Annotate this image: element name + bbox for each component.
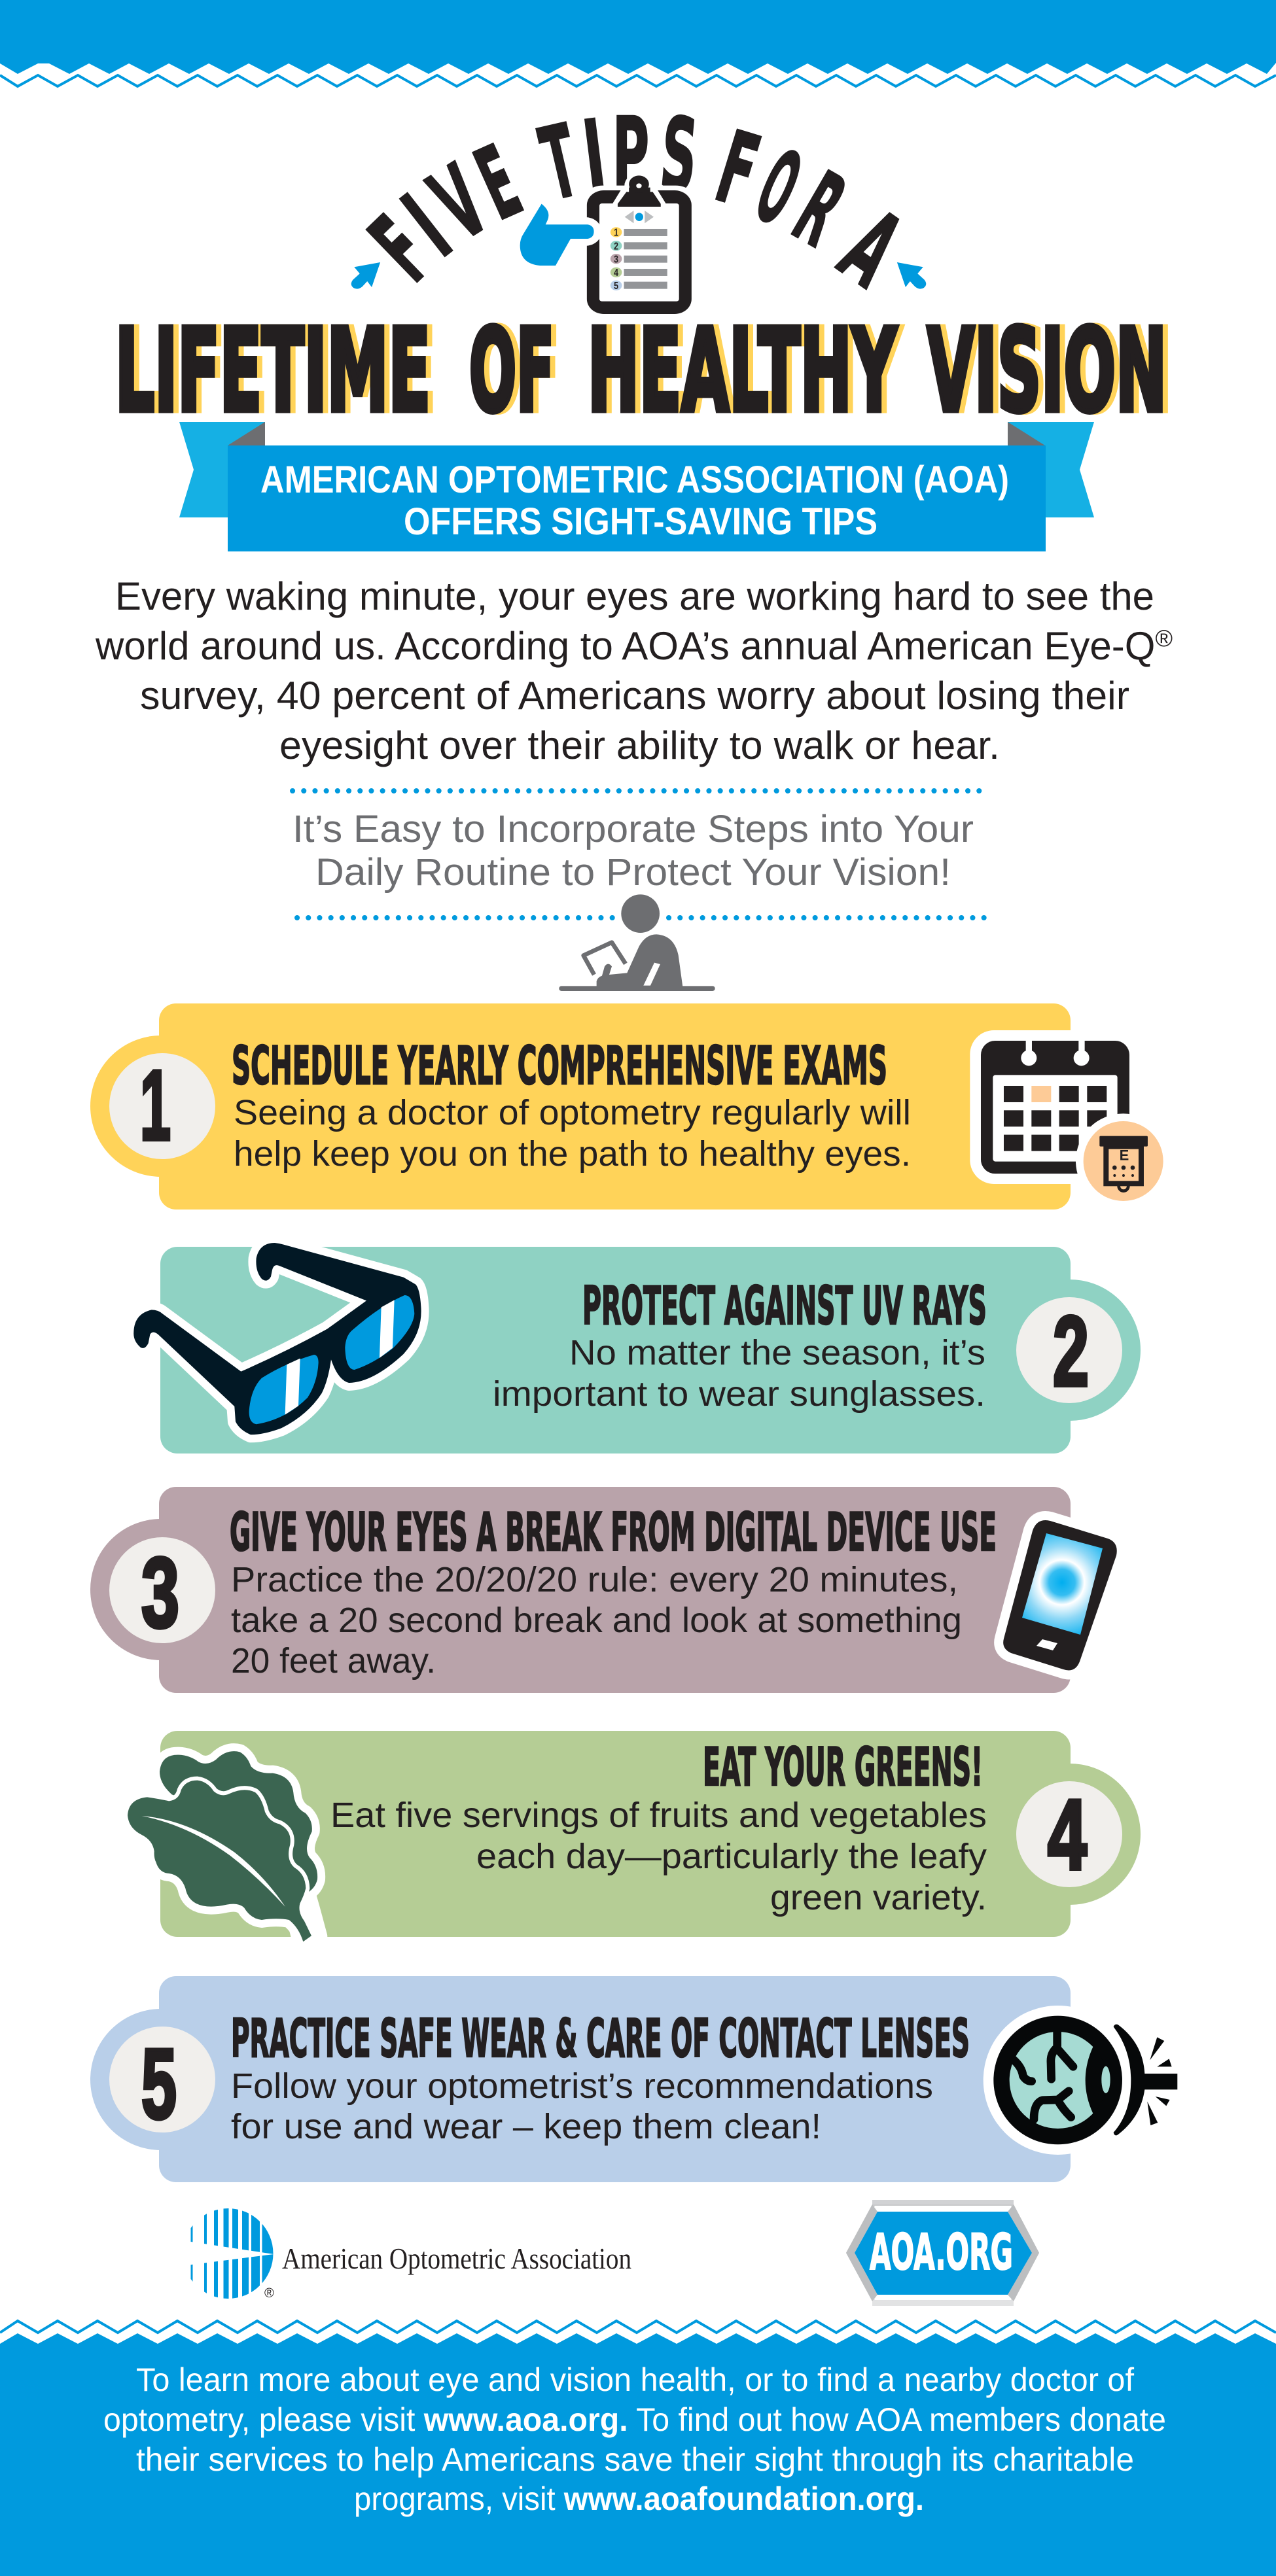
icon: clipboard with pointing hand: 5	[614, 281, 618, 292]
icon: leafy green	[128, 1751, 319, 1941]
heading: lifetime of healthy vision: HEALTHY	[588, 305, 897, 438]
icon: clipboard with pointing hand	[520, 173, 697, 319]
footer text	[103, 2361, 1166, 2517]
icon: clipboard with pointing hand: 2	[614, 241, 618, 252]
footer band	[0, 2321, 1276, 2576]
badge: aoa.org: AOA.ORG	[870, 2223, 1013, 2281]
icon: sunglasses	[133, 1243, 421, 1435]
ribbon banner: AMERICAN OPTOMETRIC ASSOCIATION (AOA)	[260, 459, 1009, 501]
panel: tip 1 exams	[90, 1003, 1171, 1210]
tip 2 text: No matter the season, it’s	[569, 1333, 985, 1372]
number 5 badge: 5	[141, 2028, 177, 2140]
number 3 badge: 3	[141, 1537, 179, 1648]
icon: person writing at desk	[559, 894, 715, 991]
tip 1 text: Seeing a doctor of optometry regularly will	[234, 1093, 911, 1132]
number 2 badge: 2	[1053, 1296, 1089, 1407]
heading: five tips for a (arched): O	[741, 129, 816, 248]
heading: lifetime of healthy vision: LIFETIME	[115, 305, 431, 438]
dotted divider upper	[292, 788, 983, 793]
number 3 badge	[109, 1537, 215, 1648]
heading: five tips for a (arched): A	[821, 188, 921, 309]
footer text: optometry, please visit www.aoa.org. To find out how AOA members donate	[103, 2401, 1166, 2438]
logo mark	[191, 2208, 274, 2299]
intro paragraph: world around us. According to AOA’s annual American Eye-Q	[96, 624, 1155, 668]
tip 4 text: Eat five servings of fruits and vegetables	[330, 1796, 987, 1835]
footer text: To learn more about eye and vision health, or to find a nearby doctor of	[136, 2361, 1134, 2398]
logo wordmark: American Optometric Association	[282, 2242, 631, 2275]
icon: clipboard with pointing hand: 1	[614, 228, 618, 238]
heading: five tips for a (arched): R	[776, 151, 863, 269]
tip 2 text	[493, 1333, 985, 1414]
intro paragraph: eyesight over their ability to walk or hear.	[279, 723, 1000, 767]
heading shadow: lifetime of healthy vision	[120, 305, 1172, 438]
tip 3 text: 20 feet away.	[231, 1641, 436, 1680]
heading: five tips for a (arched): I	[384, 175, 470, 278]
icon: left blue arrow	[351, 262, 380, 289]
heading: five tips for a (arched): V	[413, 144, 506, 262]
number 4 badge: 4	[1048, 1779, 1087, 1890]
subheading: Daily Routine to Protect Your Vision!	[315, 851, 951, 894]
intro paragraph: ®	[1155, 625, 1173, 652]
intro paragraph	[95, 574, 1173, 767]
tip 1 text	[234, 1093, 911, 1174]
panel: tip 3 digital break	[90, 1487, 1117, 1693]
tip 3 text: take a 20 second break and look at something	[231, 1601, 962, 1640]
footer text: their services to help Americans save their sight through its charitable	[136, 2441, 1134, 2478]
badge: aoa.org	[846, 2200, 1039, 2306]
footer text: programs, visit www.aoafoundation.org.	[354, 2480, 924, 2517]
ribbon banner: OFFERS SIGHT-SAVING TIPS	[404, 500, 877, 543]
subheading	[292, 808, 974, 894]
tip 3 text: Practice the 20/20/20 rule: every 20 minutes,	[231, 1560, 958, 1599]
number 2 badge	[1016, 1296, 1122, 1407]
number 1 badge	[109, 1050, 215, 1161]
icon: right blue arrow	[897, 262, 926, 289]
heading: lifetime of healthy vision: OF	[469, 305, 554, 438]
icon: calendar with eye chart: E	[1120, 1147, 1129, 1163]
ribbon banner	[179, 422, 1094, 551]
heading: five tips for a (arched): F	[705, 109, 771, 230]
heading shadow: lifetime of healthy vision: LIFETIME	[120, 305, 436, 438]
heading: five tips for a (arched): P	[612, 96, 649, 212]
tip 4 text: each day—particularly the leafy	[476, 1837, 987, 1876]
heading: five tips for a (arched): S	[656, 96, 701, 214]
heading shadow: lifetime of healthy vision: OF	[474, 305, 559, 438]
panel: tip 4 greens: EAT YOUR GREENS!	[703, 1737, 983, 1798]
logo: american optometric association	[186, 2204, 631, 2303]
tip 5 text	[231, 2066, 933, 2146]
tip 3 text	[231, 1560, 962, 1680]
subheading: It’s Easy to Incorporate Steps into Your	[292, 808, 974, 850]
panel: tip 5 contact lenses	[90, 1976, 1177, 2182]
icon: clipboard with pointing hand: 4	[614, 268, 619, 279]
intro paragraph: survey, 40 percent of Americans worry about losing their	[140, 674, 1129, 718]
heading: lifetime of healthy vision	[115, 305, 1167, 438]
heading: five tips for a (arched)	[349, 96, 921, 309]
panel: tip 4 greens	[128, 1731, 1141, 1941]
icon: calendar with eye chart	[970, 1030, 1171, 1209]
icon: eye with lens	[984, 2006, 1177, 2155]
dotted divider lower	[297, 915, 985, 920]
registered mark: ®	[264, 2286, 274, 2301]
heading: five tips for a (arched): I	[578, 98, 611, 216]
intro paragraph: Every waking minute, your eyes are working hard to see the	[115, 574, 1154, 618]
number 4 badge	[1016, 1779, 1122, 1890]
heading shadow: lifetime of healthy vision: HEALTHY	[593, 305, 902, 438]
number 5 badge	[109, 2027, 215, 2140]
tip 1 text: help keep you on the path to healthy eyes.	[234, 1134, 911, 1174]
top banner	[0, 0, 1276, 86]
heading: five tips for a (arched): F	[349, 196, 453, 302]
heading: five tips for a (arched): E	[461, 124, 536, 242]
heading: five tips for a (arched): T	[531, 103, 588, 222]
tip 2 text: important to wear sunglasses.	[493, 1374, 985, 1414]
icon: smartphone	[1003, 1520, 1117, 1671]
icon: clipboard with pointing hand: 3	[614, 254, 618, 265]
tip 4 text: green variety.	[770, 1878, 987, 1917]
panel: tip 2 uv rays	[133, 1243, 1141, 1453]
tip 5 text: Follow your optometrist’s recommendations	[231, 2066, 933, 2106]
tip 4 text	[330, 1796, 987, 1917]
tip 5 text: for use and wear – keep them clean!	[231, 2107, 821, 2146]
number 1 badge: 1	[140, 1050, 171, 1161]
